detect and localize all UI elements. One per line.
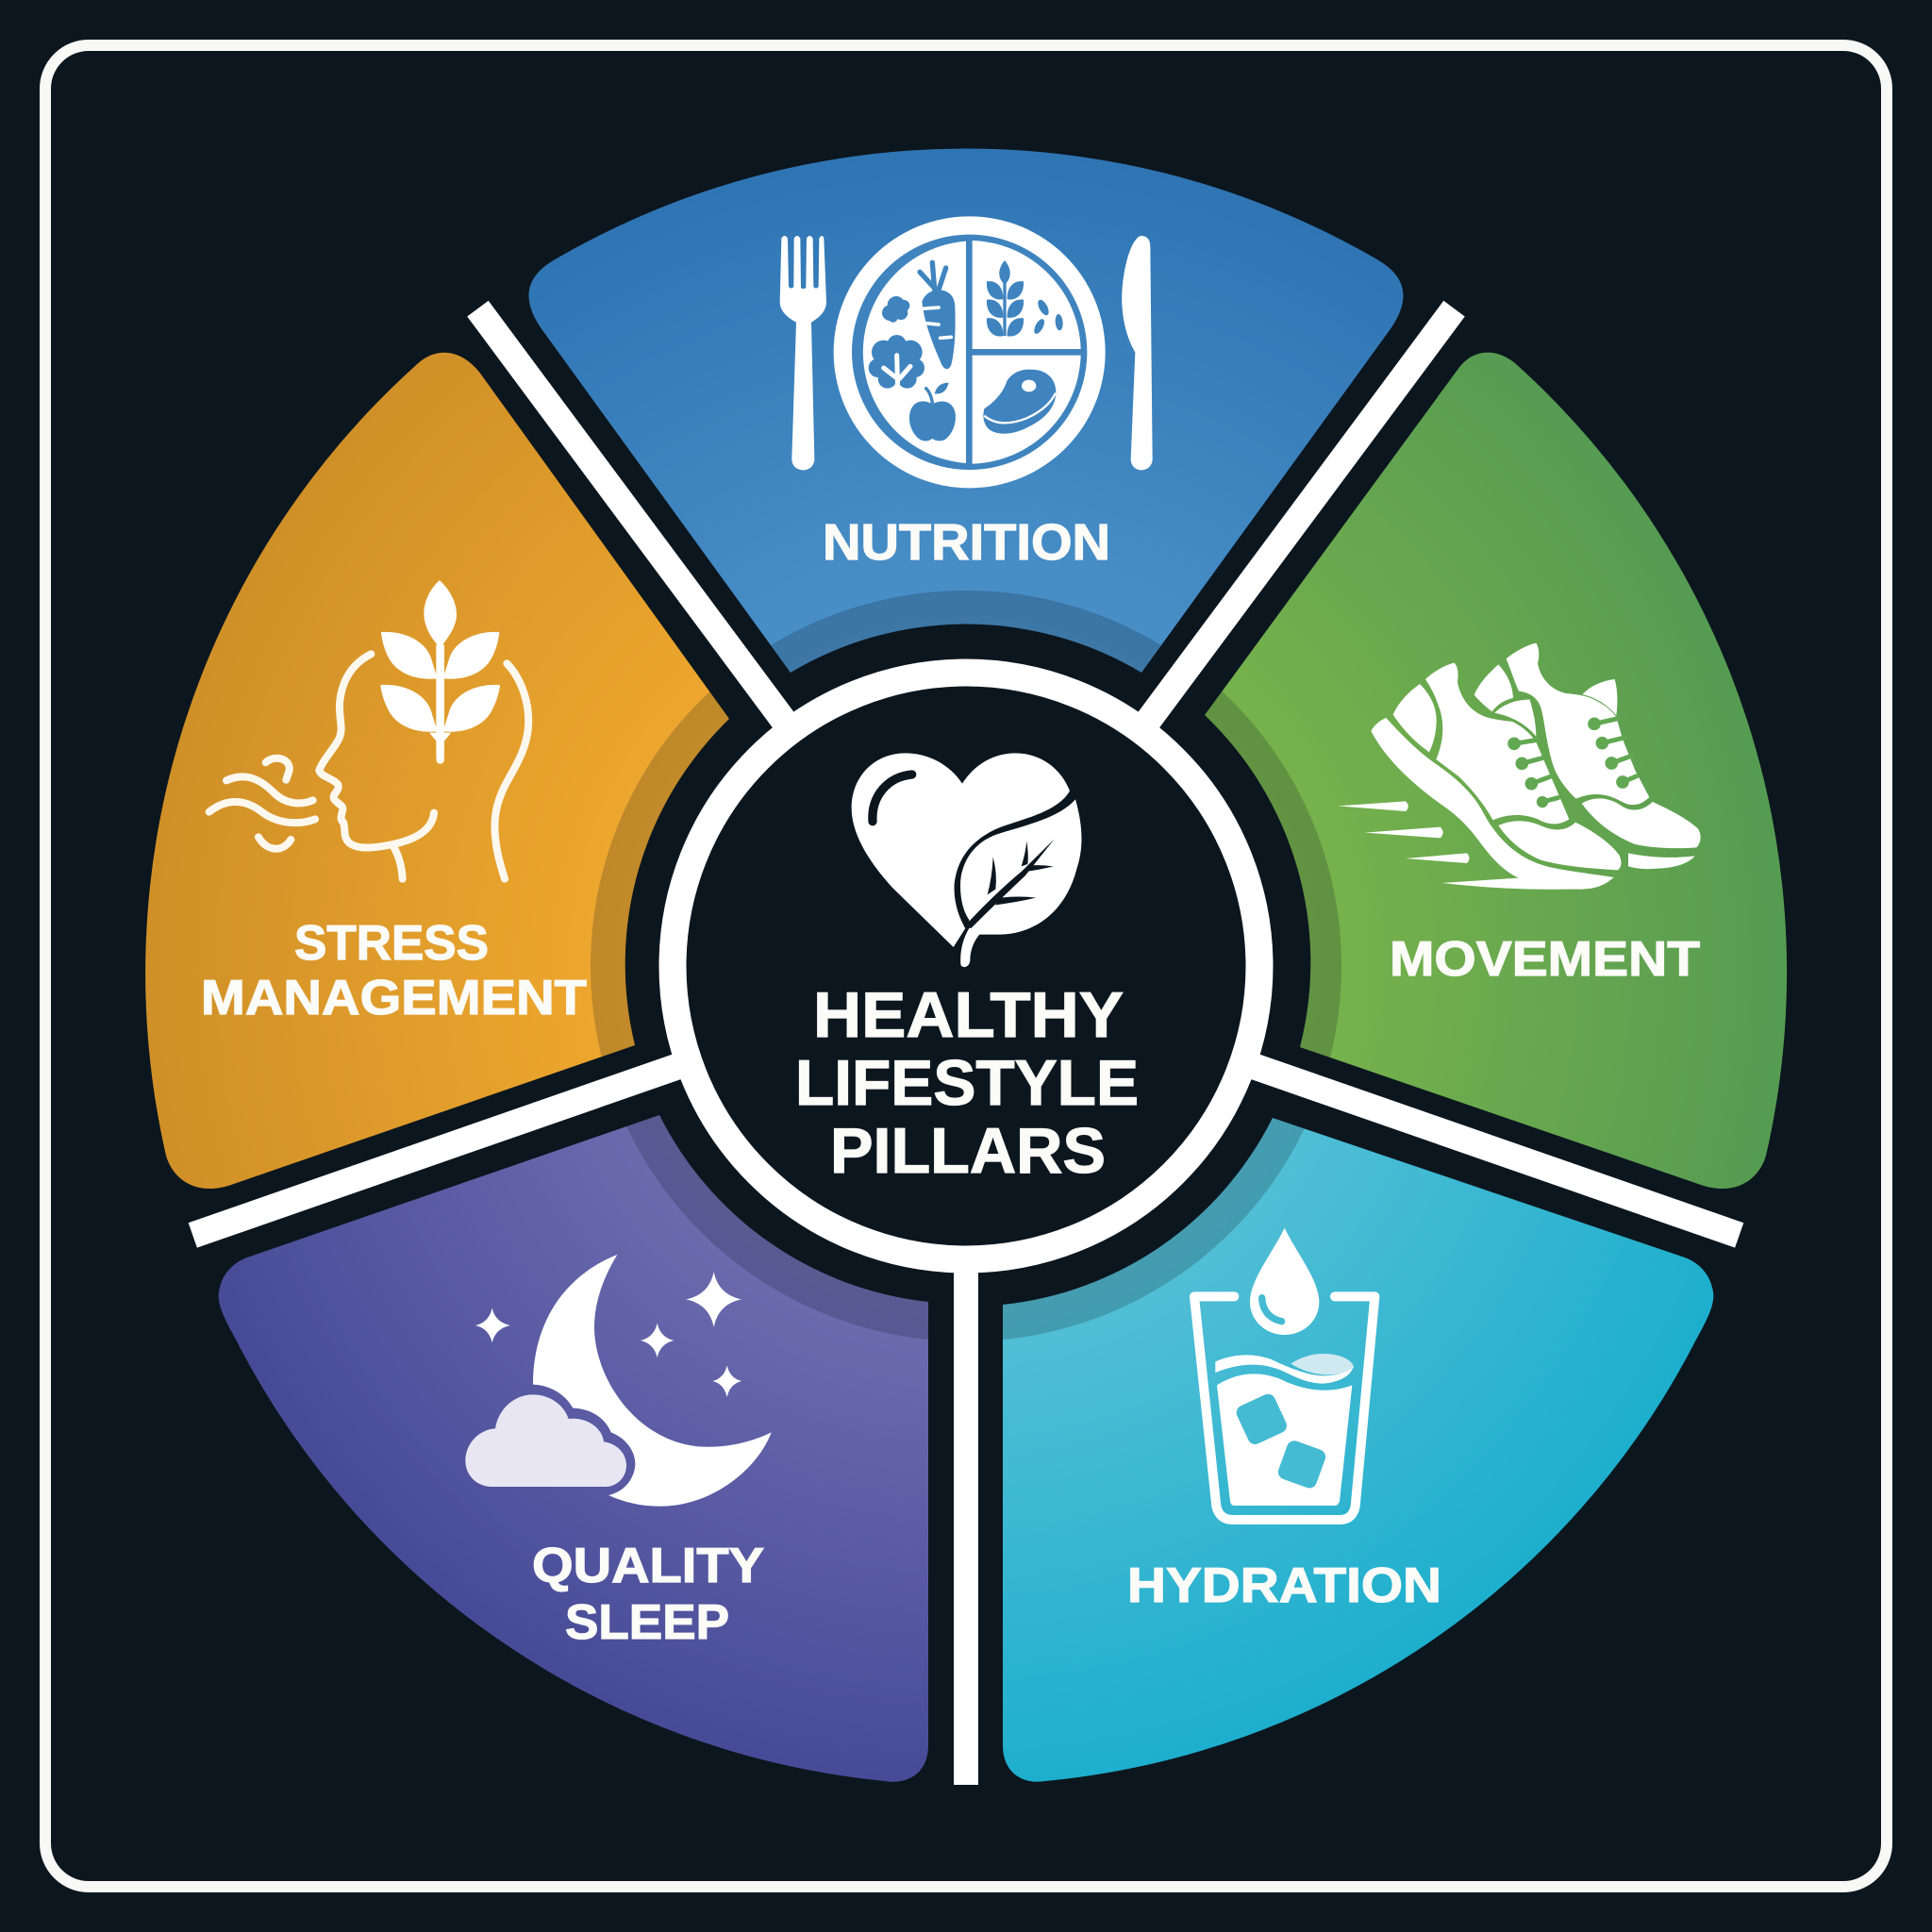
- segment: sleep wedge: [219, 1115, 928, 1782]
- title: [795, 979, 1139, 1187]
- spokes: [189, 301, 1743, 1785]
- panel: hydration: [1003, 1118, 1713, 1782]
- hub ring: [673, 673, 1259, 1259]
- icon: plate with fork and knife: [780, 216, 1153, 488]
- label: quality sleep: SLEEP: [565, 1595, 729, 1650]
- segment: nutrition wedge: [528, 149, 1404, 673]
- segment: stress wedge: [145, 353, 729, 1189]
- title: PILLARS: [830, 1115, 1106, 1187]
- panel: stress management: [145, 353, 729, 1189]
- label: quality sleep: QUALITY: [532, 1539, 764, 1593]
- center hub: [673, 673, 1259, 1259]
- title: LIFESTYLE: [795, 1047, 1139, 1119]
- title: HEALTHY: [813, 979, 1124, 1051]
- panel: nutrition: [528, 149, 1404, 673]
- label: stress management: STRESS: [294, 916, 489, 971]
- label: stress management: MANAGEMENT: [201, 971, 587, 1025]
- icon: head with plant and breath: [209, 580, 528, 879]
- label: nutrition: NUTRITION: [823, 514, 1110, 571]
- icon: glass of water: [1194, 1228, 1374, 1520]
- label: quality sleep: [532, 1539, 764, 1650]
- icon: heart with leaf: [852, 753, 1081, 967]
- icon: moon, cloud and stars: [465, 1255, 772, 1507]
- segment: movement wedge: [1205, 353, 1787, 1189]
- label: movement: MOVEMENT: [1390, 932, 1700, 987]
- segment: hydration wedge: [1003, 1118, 1713, 1782]
- panel: movement: [1205, 353, 1787, 1189]
- label: stress management: [201, 916, 587, 1025]
- icon: running shoes: [1338, 643, 1701, 890]
- label: hydration: HYDRATION: [1127, 1558, 1441, 1613]
- panel: quality sleep: [219, 1115, 928, 1782]
